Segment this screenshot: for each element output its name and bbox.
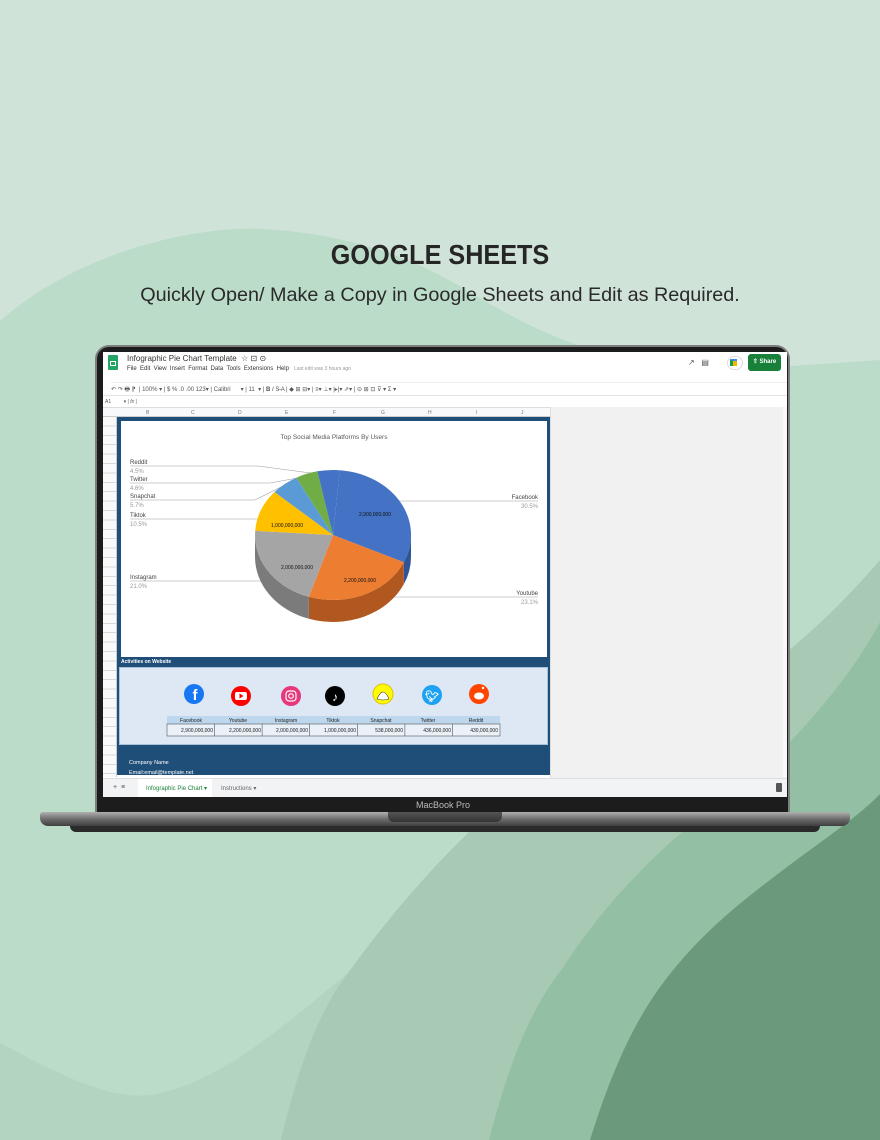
data table: 430,000,000 [470,728,498,734]
column headers: I [476,410,477,416]
slice values: 1,000,000,000 [271,523,303,529]
pie chart graphic: 23.1% [521,600,539,606]
pie slices [333,470,411,562]
laptop base [40,812,850,826]
data table: Twitter [421,718,436,724]
pie chart graphic: Facebook [512,495,539,501]
icons row [184,684,489,706]
pie chart graphic: Instagram [130,575,157,581]
icon: snapchat [373,684,393,704]
row numbers [103,417,117,777]
slice values: 2,000,000,000 [281,565,313,571]
icon: reddit [469,684,489,704]
icon: facebook [184,684,204,704]
screen: google sheets [103,352,787,797]
pie chart graphic: Snapchat [130,494,156,500]
data table: 1,000,000,000 [324,728,356,734]
gray right area [550,407,783,778]
icon: twitter: 🐦︎ [424,690,439,703]
pie chart graphic: Tiktok [130,513,147,519]
pie chart graphic: 10.5% [130,522,148,528]
pie chart graphic: Youtube [516,591,539,597]
data table: Facebook [180,718,202,724]
data table: Youtube [229,718,247,724]
title: GOOGLE SHEETS [331,239,549,270]
icon: instagram [281,686,301,706]
footer contact: Email:email@template.net [129,770,193,776]
data table: Instagram [275,718,297,724]
sheet tabs [103,778,787,797]
formula bar: A1 ▾ | fx | [105,399,137,405]
icon: youtube [231,686,251,706]
slice values: 2,900,000,000 [359,512,391,518]
legend labels: Reddit [130,460,148,466]
panel: activities [119,667,548,745]
toolbar: ↶ ↷ 🖶 ⁋ | 100% ▾ | $ % .0 .00 123▾ | Calibri ▾ | 11 ▾ | B I S̶ A | ◆ ⊞ ⊟▾ | ≡▾ ⊥▾ |▸|▾ ⇗▾ | ⊝ ⊞ ⊡ ⊽ ▾ Σ ▾ [111,387,396,393]
panel: pie chart [121,421,547,657]
sheets header: ⇧ Share [753,359,776,365]
panel: sheet dashboard [117,417,550,775]
pie chart graphic: 5.7% [130,503,144,509]
sheet tabs: Infographic Pie Chart ▾ [146,786,207,792]
sheets header: ↗ ▤ [688,358,709,367]
data table: 538,000,000 [375,728,403,734]
column headers: F [333,410,336,416]
column headers: D [238,410,242,416]
column headers: B [146,410,149,416]
sheets header [108,354,781,372]
pie sides [404,535,411,584]
sheet tabs: + ≡ [113,784,125,791]
pie chart graphic: 4.6% [130,486,144,492]
sheets header: Infographic Pie Chart Template ☆ ⊡ ⊙ [127,354,266,363]
formula bar [103,395,787,407]
data table [167,716,500,736]
column headers: G [381,410,385,416]
slice values: 2,200,000,000 [344,578,376,584]
laptop [40,345,850,832]
data table: 2,200,000,000 [229,728,261,734]
macbook label: MacBook Pro [416,800,470,810]
data table: 2,000,000,000 [276,728,308,734]
footer contact [129,760,194,776]
band: activities: Activities on Website [121,659,171,665]
column headers [103,407,550,417]
column headers: E [285,410,288,416]
pie chart graphic: 30.5% [521,504,539,510]
pie chart graphic: Twitter [130,477,148,483]
data table: Tiktok [326,718,340,724]
leader lines [130,466,538,597]
chart title: Top Social Media Platforms By Users [281,434,387,441]
icon: facebook: f [192,687,198,704]
laptop bezel [95,345,790,815]
toolbar [111,382,787,395]
data table: Snapchat [370,718,392,724]
data table: 436,000,000 [423,728,451,734]
icon: twitter [422,685,442,705]
pie chart graphic: 21.0% [130,584,148,590]
icon: tiktok [325,686,345,706]
sheet tabs: Instructions ▾ [221,786,256,792]
data table: 2,900,000,000 [181,728,213,734]
column headers: J [521,410,524,416]
slice values [271,512,391,584]
sheets header: File Edit View Insert Format Data Tools Extensions Help Last edit was 3 hours ago [127,366,351,372]
data table: Reddit [469,718,484,724]
pie chart graphic: 4.5% [130,469,144,475]
icon: tiktok: ♪ [332,690,338,704]
column headers: C [191,410,195,416]
column headers: H [428,410,432,416]
footer contact: Company Name [129,760,169,766]
subtitle: Quickly Open/ Make a Copy in Google Sheets and Edit as Required. [140,284,740,306]
